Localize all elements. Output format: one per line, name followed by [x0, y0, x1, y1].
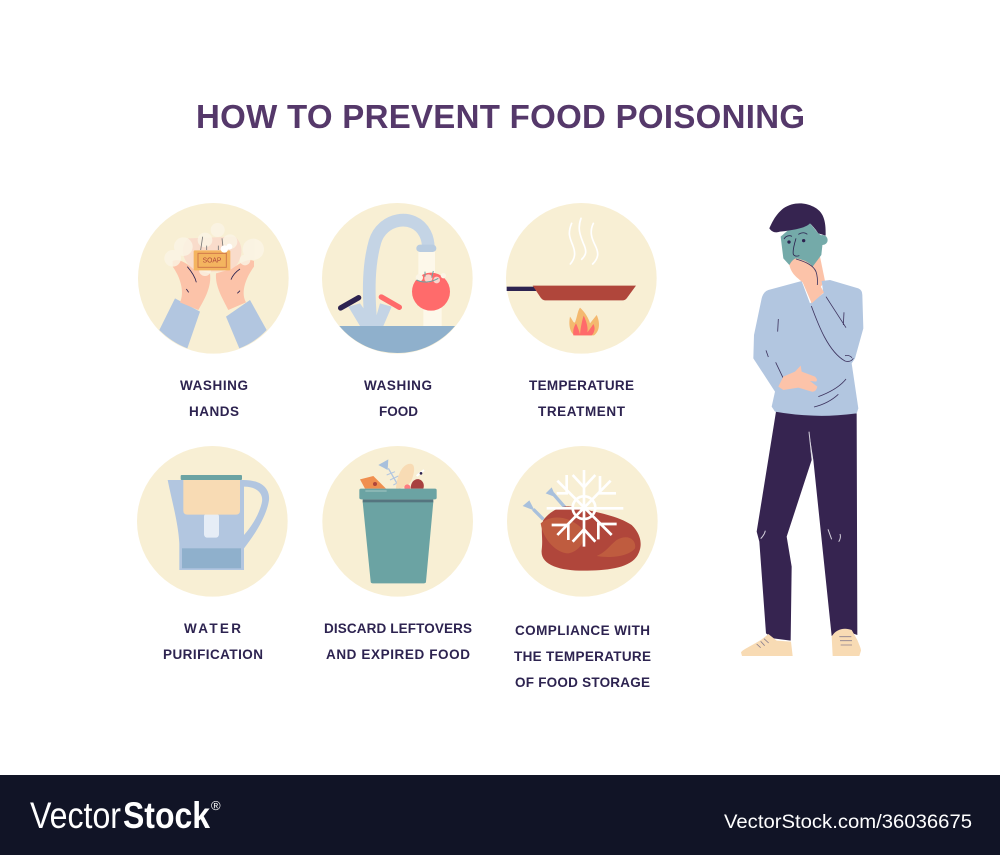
- icon: frozen turkey: [507, 446, 658, 597]
- title: HOW TO PREVENT FOOD POISONING: [196, 98, 805, 135]
- lower hand: [778, 366, 817, 392]
- logo wordmark: Vector: [30, 795, 121, 836]
- label: water purification: [163, 621, 263, 662]
- label: discard leftovers: DISCARD LEFTOVERS: [324, 621, 472, 636]
- label: discard leftovers: [324, 621, 472, 662]
- raised hand: [789, 258, 824, 303]
- icon: faucet and tomato: [322, 203, 473, 354]
- face: [781, 223, 823, 267]
- label: food storage temperature: THE TEMPERATURE: [514, 649, 651, 664]
- label: washing hands: [180, 378, 248, 419]
- label: washing hands: WASHING: [180, 378, 248, 393]
- label: washing food: WASHING: [364, 378, 432, 393]
- logo wordmark: [30, 795, 221, 836]
- panel: temperature treatment: [506, 203, 657, 419]
- neck: [810, 257, 825, 292]
- label: washing food: FOOD: [379, 404, 418, 419]
- label: water purification: WATER: [184, 621, 241, 636]
- label: water purification: PURIFICATION: [163, 647, 263, 662]
- label: food storage temperature: [514, 623, 651, 690]
- image id: VectorStock.com/36036675: [724, 812, 972, 833]
- panel: water purification: [137, 446, 288, 662]
- facial features: [784, 233, 807, 256]
- icon: water filter jug: [137, 446, 288, 597]
- panel: washing food: [322, 203, 473, 419]
- footer bar: [0, 775, 1000, 855]
- label: temperature treatment: [529, 378, 634, 419]
- hair: [769, 203, 826, 236]
- soap label: SOAP: [203, 258, 222, 265]
- pants and shoes: [741, 412, 861, 656]
- panel: washing hands: [138, 203, 289, 419]
- upper body: [753, 203, 863, 416]
- icon: washing hands: [138, 203, 289, 354]
- icon: trash bin with food: [322, 446, 473, 597]
- panel: food storage temperature: [507, 446, 658, 690]
- label: food storage temperature: OF FOOD STORAGE: [515, 675, 650, 690]
- label: washing hands: HANDS: [189, 404, 239, 419]
- panel: discard leftovers: [322, 446, 473, 662]
- logo wordmark: Stock: [123, 795, 210, 836]
- label: food storage temperature: COMPLIANCE WITH: [515, 623, 650, 638]
- ear: [818, 235, 828, 245]
- logo wordmark: ®: [211, 798, 221, 813]
- label: temperature treatment: TREATMENT: [538, 404, 626, 419]
- label: temperature treatment: TEMPERATURE: [529, 378, 634, 393]
- label: discard leftovers: AND EXPIRED FOOD: [326, 647, 470, 662]
- label: washing food: [364, 378, 432, 419]
- icon: frying pan over flame: [506, 203, 657, 354]
- character: sick thinking man: [741, 203, 863, 656]
- sweater: [753, 280, 863, 416]
